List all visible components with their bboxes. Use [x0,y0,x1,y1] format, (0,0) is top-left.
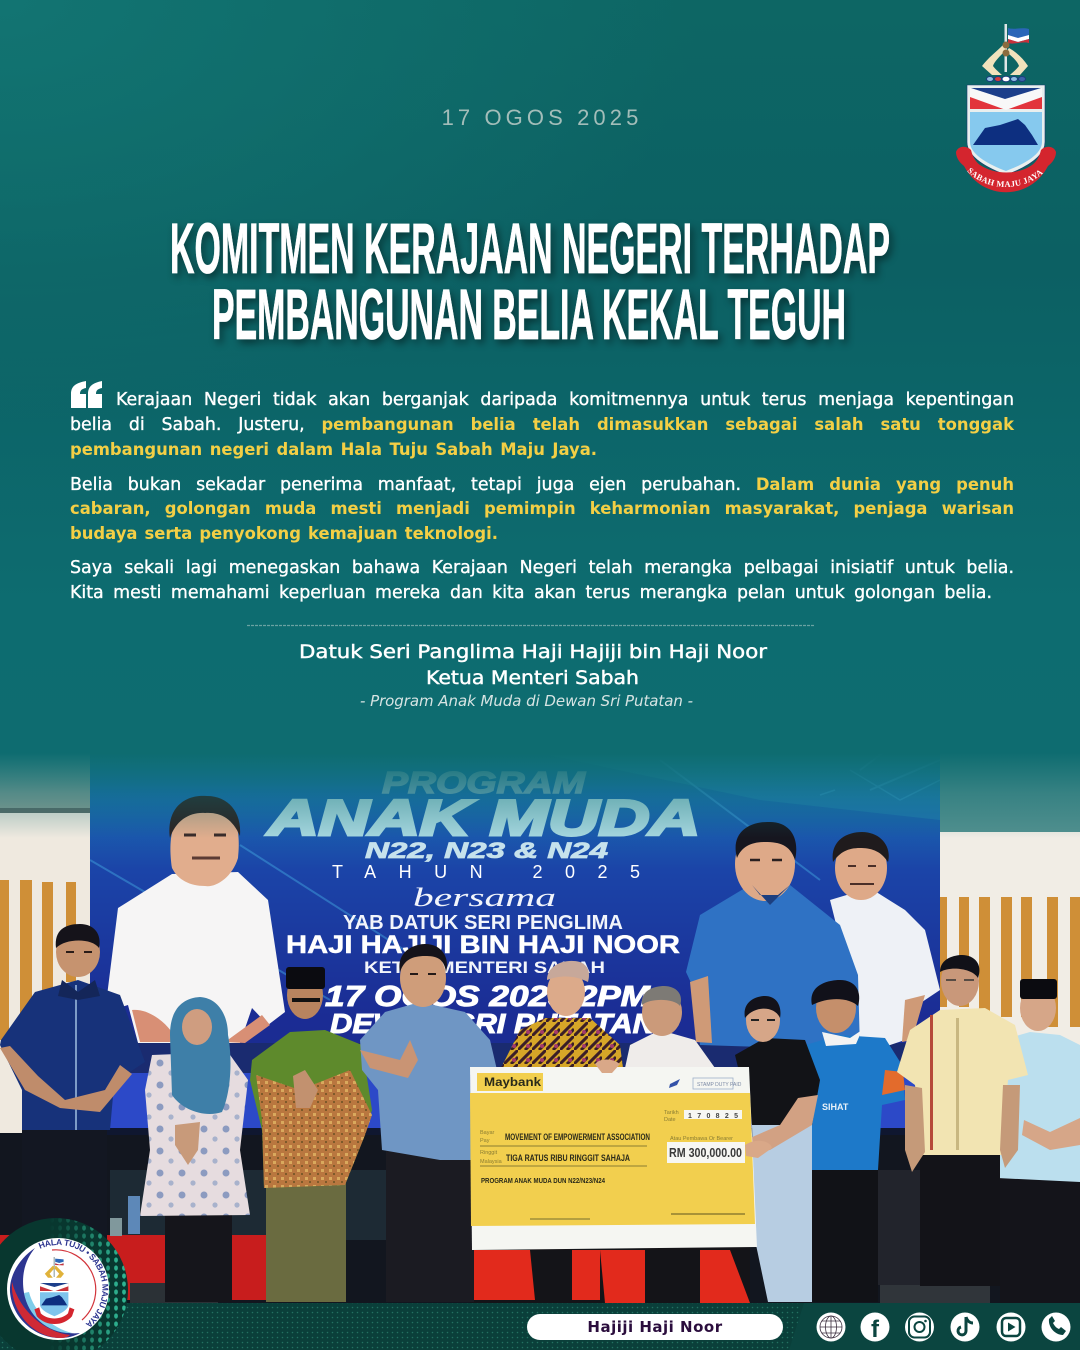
logo swoosh [10,1248,80,1338]
top fade into background [0,738,1080,838]
cheque: STAMP DUTY PAID [697,1082,742,1088]
quote text [70,390,1014,603]
icon: facebook: f [871,1316,880,1343]
banner lettering: 17 OGOS 2025 2PM [325,981,651,1013]
banner portrait: man in blue shirt [686,822,860,1050]
cheque [470,1067,757,1250]
banner lettering: KETUA MENTERI SABAH [364,958,605,977]
hands on cheque [595,1060,772,1158]
footer bar [0,1303,1080,1350]
banner lettering: ANAK MUDA [265,790,700,846]
cheque: Pay [480,1138,490,1144]
cheque: Date [664,1117,676,1123]
state crest [956,24,1056,192]
icon: instagram [905,1312,934,1342]
icon: website globe [816,1312,846,1342]
attribution [247,624,814,710]
cheque: Malaysia [480,1159,503,1165]
cheque: Ringgit [480,1150,498,1156]
crest ribbon: SABAH MAJU JAYA [967,168,1044,187]
banner lettering [265,765,700,1039]
attribution: Datuk Seri Panglima Haji Hajiji bin Haji Noor [299,641,767,663]
name pill: Hajiji Haji Noor [587,1318,723,1336]
stage backdrop banner [90,740,940,1138]
cheque: Atau Pembawa Or Bearer [670,1136,733,1142]
wall and wooden slats [0,745,1080,1315]
person: man in white shirt behind cheque [625,986,715,1068]
logo: Hala Tuju Sabah Maju Jaya [0,1218,128,1350]
cheque: Maybank [484,1075,541,1089]
date: 17 OGOS 2025 [442,105,642,130]
stage chairs and table [0,1135,1080,1305]
quote text: pembangunan negeri dalam Hala Tuju Sabah Maju Jaya. [70,440,597,459]
banner portrait: man in white shirt [830,832,940,1055]
person: man in blue jersey: SIHAT [822,1102,849,1112]
attribution: Ketua Menteri Sabah [426,667,639,689]
person: man in light blue shirt [997,979,1080,1303]
person: chief minister in cap and batik [500,961,623,1068]
person: man in navy shirt [0,924,145,1250]
crest beads [986,76,1026,82]
banner lettering: DEWAN SRI PUTATAN [330,1008,656,1039]
cheque: Tarikh [664,1110,679,1116]
icon: tiktok [950,1312,980,1342]
logo: Hala Tuju Sabah Maju Jaya: HALA TUJU • SABAH MAJU JAYA [38,1239,108,1327]
quote text: Kerajaan Negeri tidak akan berganjak daripada komitmennya untuk terus menjaga kepentingan [116,390,1014,410]
icon: phone [1042,1312,1070,1342]
cheque: TIGA RATUS RIBU RINGGIT SAHAJA [506,1153,630,1163]
icon: opening quotation mark [71,381,102,408]
person: man in blue jersey [795,980,905,1302]
cheque: Bayar [480,1130,495,1136]
quote text: cabaran, golongan muda mesti menjadi pemimpin keharmonian masyarakat, penjaga warisan [70,499,1014,518]
banner lettering: TAHUN 2025 [332,862,640,882]
banner lettering: PROGRAM [382,765,586,800]
quote text: budaya serta penyokong kemajuan teknologi. [70,524,498,543]
crest shield [967,85,1045,175]
banner portrait: left man [105,796,285,1043]
crest flag [1004,24,1029,72]
icon: facebook [860,1312,890,1343]
banner lettering: YAB DATUK SERI PENGLIMA [343,912,623,934]
cheque: PROGRAM ANAK MUDA DUN N22/N23/N24 [481,1176,606,1185]
quote text: Kita mesti memahami keperluan mereka dan kita akan terus merangka pelan untuk golongan belia. [70,583,992,603]
banner lettering: N22, N23 & N24 [365,838,608,863]
banner lettering: bersama [413,883,556,912]
cheque: 1 7 0 8 2 5 [688,1113,738,1120]
quote text: Belia bukan sekadar penerima manfaat, tetapi juga ejen perubahan. Dalam dunia yang penuh [70,475,1014,495]
person: man in cream shirt [897,955,1028,1286]
quote text: belia di Sabah. Justeru, pembangunan belia telah dimasukkan sebagai salah satu tonggak [70,415,1014,435]
person: woman in black polo [735,996,820,1302]
cheque: MOVEMENT OF EMPOWERMENT ASSOCIATION [505,1132,650,1142]
quote text: Saya sekali lagi menegaskan bahawa Kerajaan Negeri telah merangka pelbagai inisiatif untuk belia. [70,558,1014,578]
attribution: - Program Anak Muda di Dewan Sri Putatan - [360,692,693,710]
crest arms [982,42,1028,75]
logo crest [34,1257,74,1324]
banner lettering: HAJI HAJIJI BIN HAJI NOOR [286,931,680,959]
icon: youtube [996,1312,1026,1342]
person: man in blue shirt [360,944,497,1302]
crest ribbon [956,146,1056,192]
name pill [527,1314,783,1340]
person: man in green baju [250,967,372,1302]
person: woman in hijab [140,997,250,1302]
title [170,210,896,355]
cheque: RM 300,000.00 [669,1145,742,1160]
